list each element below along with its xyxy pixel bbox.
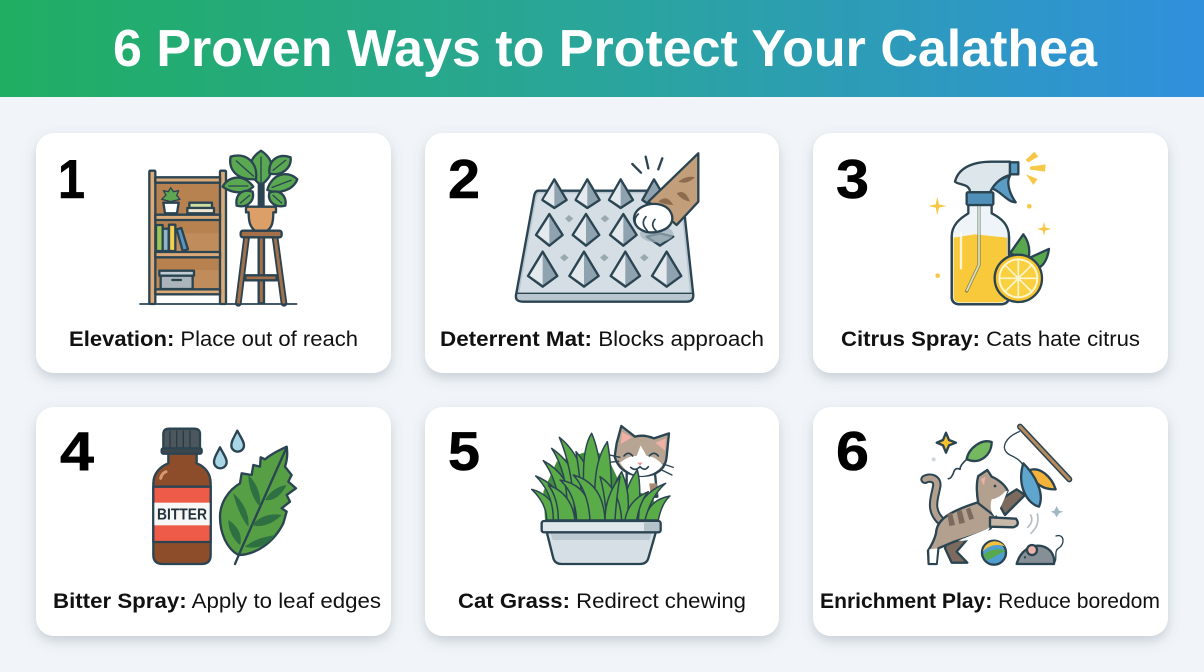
icon: citrus spray bottle [928, 152, 1051, 304]
number 2: 2 [448, 148, 480, 210]
number 6: 6 [836, 420, 869, 482]
icon: bitter bottle and leaf [153, 429, 296, 564]
panel: bitter spray [36, 407, 391, 636]
icon: cat playing with wand and mouse [925, 427, 1069, 565]
header banner [0, 0, 1204, 97]
icon: cat in grass tub [532, 426, 673, 564]
caption 5: Cat Grass: Redirect chewing [458, 589, 746, 613]
number 4: 4 [60, 420, 94, 482]
panel: enrichment play [813, 407, 1168, 636]
panel: deterrent mat [425, 133, 779, 373]
number 1: 1 [58, 148, 85, 210]
panel: citrus spray [813, 133, 1168, 373]
panel: elevation [36, 133, 391, 373]
caption 2: Deterrent Mat: Blocks approach [440, 327, 764, 351]
number 3: 3 [836, 148, 869, 210]
icon: bitter bottle and leaf: BITTER [157, 507, 207, 524]
caption 1: Elevation: Place out of reach [69, 327, 358, 351]
panel: cat grass [425, 407, 779, 636]
icon: spiked mat with cat paw [516, 153, 698, 302]
title: 6 Proven Ways to Protect Your Calathea [113, 20, 1098, 78]
number 5: 5 [448, 420, 480, 482]
icon: bookshelf and plant on stool [140, 151, 297, 304]
caption 3: Citrus Spray: Cats hate citrus [841, 327, 1140, 351]
caption 4: Bitter Spray: Apply to leaf edges [53, 589, 381, 613]
caption 6: Enrichment Play: Reduce boredom [820, 589, 1160, 613]
